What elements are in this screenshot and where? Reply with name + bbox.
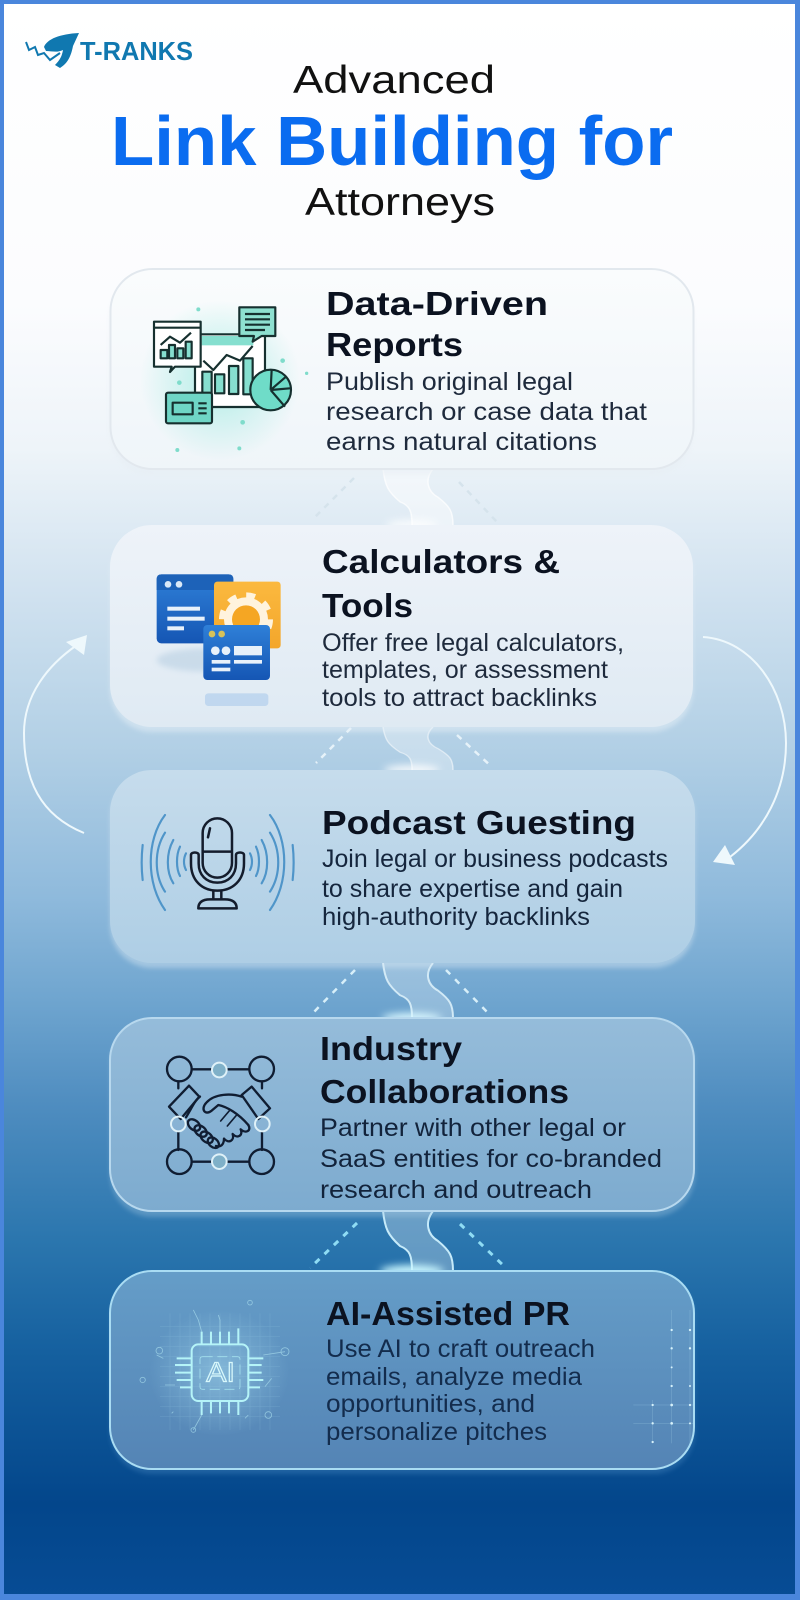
heading: Calculators & [322, 543, 560, 580]
text block [322, 845, 668, 931]
text block: SaaS entities for co-branded [320, 1145, 662, 1173]
text block: opportunities, and [326, 1390, 535, 1418]
text block: high-authority backlinks [322, 903, 590, 931]
heading: Industry [320, 1030, 463, 1067]
text block: Use AI to craft outreach [326, 1335, 595, 1363]
heading: Tools [322, 587, 413, 624]
panel: Data-Driven Reports [110, 269, 694, 475]
heading: Podcast Guesting [322, 804, 636, 841]
heading: Data-Driven [326, 285, 548, 322]
heading [322, 543, 560, 624]
icon: podcast microphone [142, 815, 294, 910]
text block: personalize pitches [326, 1418, 547, 1446]
icon: calculators and tools windows [157, 574, 281, 706]
title [111, 59, 673, 224]
text block: templates, or assessment [322, 656, 608, 684]
panel: AI-Assisted PR [110, 1271, 695, 1474]
connector: card 2 to card 3 [316, 727, 492, 775]
heading: Reports [326, 326, 463, 363]
text block [320, 1114, 662, 1204]
decorative dot grid [633, 1310, 693, 1443]
heading [326, 285, 548, 363]
heading: AI-Assisted PR [326, 1295, 570, 1332]
panel: Calculators & Tools [110, 525, 693, 732]
logo: T-RANKS [26, 33, 193, 68]
arrow: left loop [24, 635, 87, 833]
connector: card 1 to card 2 [314, 469, 497, 530]
connector: card 4 to card 5 [310, 1211, 505, 1277]
text block: Publish original legal [326, 368, 573, 396]
panel: Podcast Guesting [110, 770, 695, 968]
panel: Industry Collaborations [110, 1018, 695, 1217]
text block: to share expertise and gain [322, 875, 623, 903]
text block [322, 629, 624, 712]
title: Advanced [293, 59, 495, 102]
text block [326, 1335, 595, 1446]
text block: Offer free legal calculators, [322, 629, 624, 657]
icon: AI chip: AI [206, 1357, 235, 1388]
icon: data reports [140, 300, 308, 460]
text block: tools to attract backlinks [322, 684, 597, 712]
title: Attorneys [305, 181, 495, 224]
logo: T-RANKS: T-RANKS [80, 36, 193, 66]
heading [320, 1030, 569, 1110]
text block: earns natural citations [326, 428, 597, 456]
connector: card 3 to card 4 [311, 963, 490, 1023]
text block: research or case data that [326, 398, 647, 426]
text block: emails, analyze media [326, 1363, 582, 1391]
text block: research and outreach [320, 1176, 592, 1204]
icon: handshake network [167, 1057, 274, 1174]
title: Link Building for [111, 102, 673, 180]
text block [326, 368, 647, 456]
icon: AI chip [140, 1300, 289, 1436]
text block: Partner with other legal or [320, 1114, 626, 1142]
text block: Join legal or business podcasts [322, 845, 668, 873]
heading: Collaborations [320, 1073, 569, 1110]
arrow: right loop [703, 637, 786, 865]
